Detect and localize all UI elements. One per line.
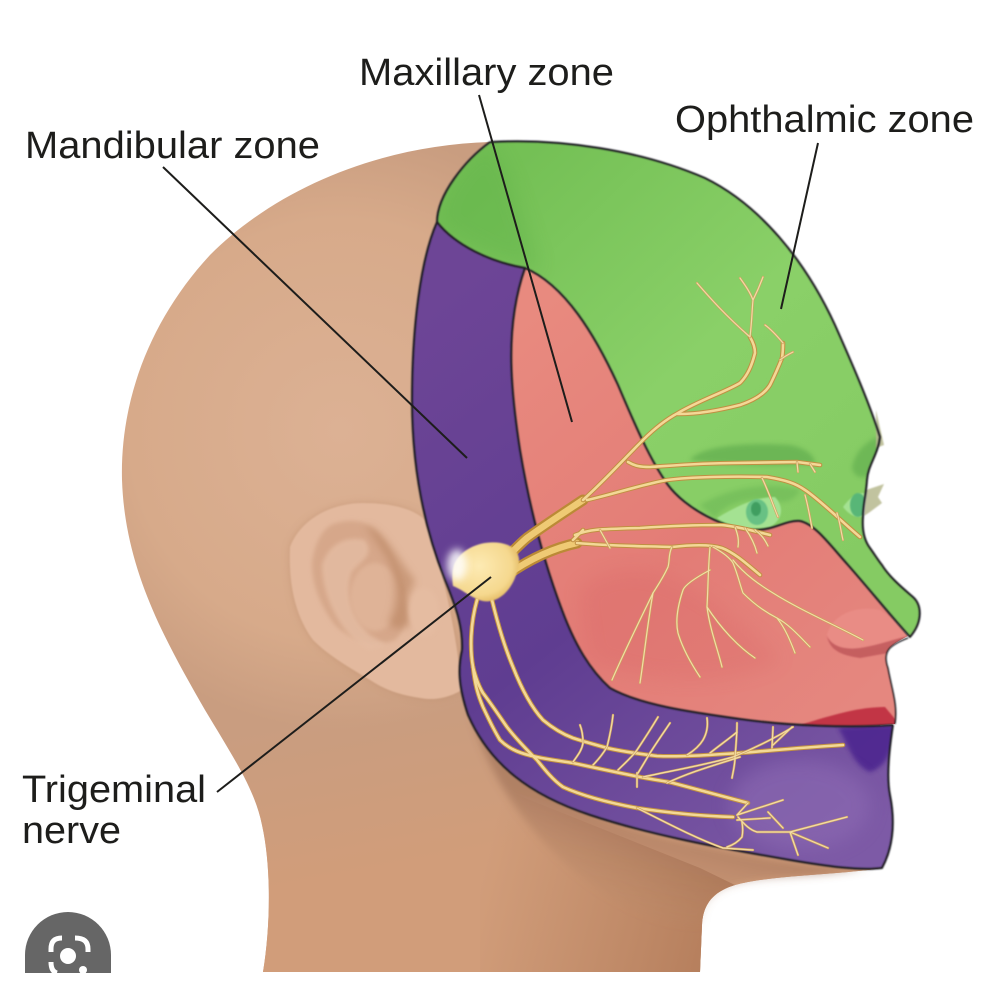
near iris xyxy=(746,499,768,525)
lower lip xyxy=(838,725,895,772)
label: Trigeminal nerve: nerve xyxy=(22,810,121,852)
leader line: trigeminal xyxy=(217,577,491,792)
icon: lens search badge xyxy=(25,912,111,974)
ear canal shadow xyxy=(365,525,415,629)
label: Maxillary zone: Maxillary zone xyxy=(359,52,614,94)
near eye xyxy=(717,497,781,528)
label: Ophthalmic zone: Ophthalmic zone xyxy=(675,99,974,141)
neck shading xyxy=(205,640,882,972)
label: Mandibular zone: Mandibular zone xyxy=(25,125,320,167)
eyelashes xyxy=(864,410,884,516)
nerve branches xyxy=(471,277,863,855)
maxillary zone (red) xyxy=(512,270,908,726)
mandibular zone (purple) xyxy=(400,210,910,880)
ear tragus xyxy=(409,588,439,636)
upper eyelid shade xyxy=(702,486,798,516)
chin shadow xyxy=(470,710,870,925)
ear antihelix xyxy=(322,539,385,650)
ear outer xyxy=(290,503,462,699)
leader line: ophthalmic xyxy=(781,143,818,309)
upper lip xyxy=(800,707,900,726)
lens corner marks xyxy=(51,938,88,973)
ganglion left fade xyxy=(447,549,467,581)
chin highlight xyxy=(733,762,863,845)
leader line: mandibular xyxy=(163,167,467,458)
trigeminal ganglion xyxy=(452,542,519,601)
forehead shade xyxy=(457,170,527,258)
near pupil xyxy=(751,502,761,516)
lens centre xyxy=(60,948,76,964)
lens dot xyxy=(79,966,87,974)
cheek shade xyxy=(580,571,780,679)
zone boundary lines xyxy=(412,141,920,869)
neck right shade xyxy=(480,780,735,972)
label: Trigeminal nerve: Trigeminal xyxy=(22,769,206,811)
nostril shade xyxy=(827,636,908,658)
label: Trigeminal nerve xyxy=(22,769,206,852)
ear concha xyxy=(350,563,400,631)
bottom white crop xyxy=(0,973,1000,1000)
leader line: maxillary xyxy=(479,95,572,422)
ear scapha xyxy=(312,521,406,643)
far brow xyxy=(852,437,876,478)
nose wing xyxy=(828,610,907,646)
eyebrow xyxy=(690,444,815,465)
head and neck skin xyxy=(122,142,882,972)
far eye xyxy=(843,493,868,517)
far iris xyxy=(850,493,866,517)
ear back shadow xyxy=(290,503,462,699)
ear xyxy=(290,503,462,699)
ophthalmic zone (green) xyxy=(420,130,930,650)
illustration: head in profile xyxy=(122,130,930,972)
